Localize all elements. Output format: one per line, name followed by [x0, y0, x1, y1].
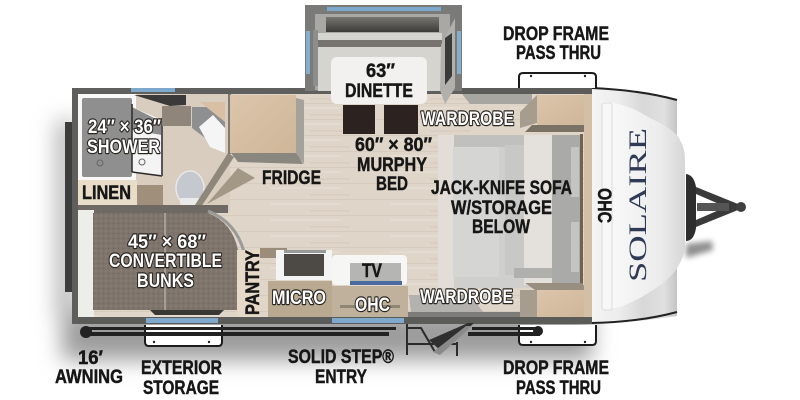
- label: ohc: OHC: [355, 295, 390, 316]
- right slide wall: [440, 18, 455, 104]
- label: solid step entry: SOLID STEP®: [288, 347, 394, 368]
- label: dinette: [345, 61, 413, 102]
- trailer floorplan: [65, 5, 594, 324]
- chair right: [384, 105, 418, 134]
- bunk partition wall: [78, 205, 228, 213]
- label: murphy bed: 60″ × 80″: [355, 135, 432, 156]
- kitchen counter: [268, 255, 408, 317]
- label: drop frame top: DROP FRAME: [503, 24, 609, 45]
- window right: [457, 31, 461, 74]
- label: drop frame bottom: PASS THRU: [516, 378, 601, 399]
- top right wall shade: [462, 94, 532, 104]
- label: bunks: 45″ × 68″: [128, 232, 206, 253]
- window top: [327, 7, 441, 11]
- floor: [78, 94, 592, 317]
- front cap: [592, 88, 685, 324]
- label: murphy bed: BED: [376, 174, 408, 195]
- top pass thru box: [519, 73, 596, 88]
- bottom pass thru box: [519, 325, 596, 345]
- cap vertical strip: [602, 103, 612, 310]
- left inner wall: [72, 88, 78, 324]
- ohc cabinet: [332, 286, 408, 317]
- left slide wall post: [313, 30, 318, 86]
- awning rail right: [468, 326, 543, 336]
- lower wardrobe cabinet: [520, 283, 587, 317]
- stove: [260, 248, 332, 280]
- brand logo: SOLAIRE: [625, 128, 652, 282]
- label: dinette: DINETTE: [345, 81, 413, 102]
- label: sofa: BELOW: [472, 217, 530, 238]
- label: dinette: 63″: [366, 61, 395, 82]
- top wall right: [462, 88, 594, 94]
- label: wardrobe bottom: WARDROBE: [420, 287, 513, 308]
- label: bunks: BUNKS: [137, 271, 194, 292]
- front wall bottom: [72, 317, 594, 324]
- label: fridge: FRIDGE: [262, 168, 321, 189]
- label: exterior storage: STORAGE: [143, 378, 219, 399]
- label: shower: 24″ × 36″: [88, 117, 161, 138]
- entry steps: [407, 323, 474, 356]
- microwave cabinet: [268, 281, 332, 317]
- label: awning: AWNING: [55, 367, 123, 388]
- convertible bunks: [78, 210, 244, 318]
- shower: [78, 94, 136, 180]
- label: awning: 16′: [78, 348, 103, 369]
- label: drop frame top: PASS THRU: [516, 43, 601, 64]
- chair left: [343, 105, 375, 134]
- dinette top bench: [326, 17, 439, 32]
- dinette table: [331, 57, 427, 104]
- bathroom: [78, 94, 255, 210]
- sofa: [438, 134, 583, 289]
- toilet: [176, 171, 204, 205]
- label: solid step entry: ENTRY: [315, 367, 367, 388]
- label: shower: [87, 117, 161, 158]
- label: bunks: CONVERTIBLE: [109, 251, 222, 272]
- hitch shadow: [686, 241, 713, 258]
- label: awning: [55, 348, 123, 388]
- left rear bumper: [65, 122, 72, 292]
- main wall shell: [72, 88, 594, 324]
- storage box: [145, 325, 222, 346]
- dinette slide-out: [305, 5, 462, 134]
- hitch tongue: [686, 174, 746, 241]
- door window: [332, 318, 404, 323]
- label: sofa: [431, 178, 572, 238]
- label: solid step entry: [288, 347, 394, 388]
- cap center panel: [602, 102, 685, 310]
- label: wardrobe top: WARDROBE: [421, 109, 514, 130]
- step landing: [409, 295, 484, 313]
- label: murphy bed: [355, 135, 432, 195]
- pantry cabinet: [237, 250, 260, 318]
- bathroom upper cabinet: [134, 95, 186, 106]
- label: drop frame bottom: [503, 358, 609, 399]
- label: drop frame bottom: DROP FRAME: [503, 358, 609, 379]
- rear wall window: [131, 88, 175, 92]
- bathroom sink: [192, 107, 225, 153]
- label: linen: LINEN: [82, 183, 131, 204]
- linen cabinet: [78, 180, 137, 205]
- fridge cabinet: [228, 94, 304, 164]
- upper wardrobe cabinet: [520, 95, 587, 132]
- label: sofa: W/STORAGE: [451, 198, 552, 219]
- ohc vertical label: OHC: [593, 188, 614, 223]
- label: exterior storage: [141, 358, 222, 399]
- label: tv: TV: [362, 261, 382, 282]
- label: bunks: [109, 232, 222, 292]
- label: pantry: PANTRY: [243, 250, 264, 315]
- cabinet end strip: [584, 94, 592, 317]
- label: sofa: JACK-KNIFE SOFA: [431, 178, 572, 199]
- window left: [306, 31, 310, 74]
- storage window: [146, 318, 218, 323]
- awning rail left: [80, 326, 396, 338]
- ground shadow: [56, 120, 592, 360]
- label: exterior storage: EXTERIOR: [141, 358, 222, 379]
- label: murphy bed: MURPHY: [357, 155, 427, 176]
- tv: [350, 263, 401, 283]
- bathroom door: [195, 153, 234, 207]
- lower floor strip: [408, 312, 538, 318]
- wall tv panel: [445, 33, 452, 85]
- label: micro: MICRO: [272, 288, 326, 309]
- label: drop frame top: [503, 24, 609, 64]
- label: shower: SHOWER: [87, 137, 160, 158]
